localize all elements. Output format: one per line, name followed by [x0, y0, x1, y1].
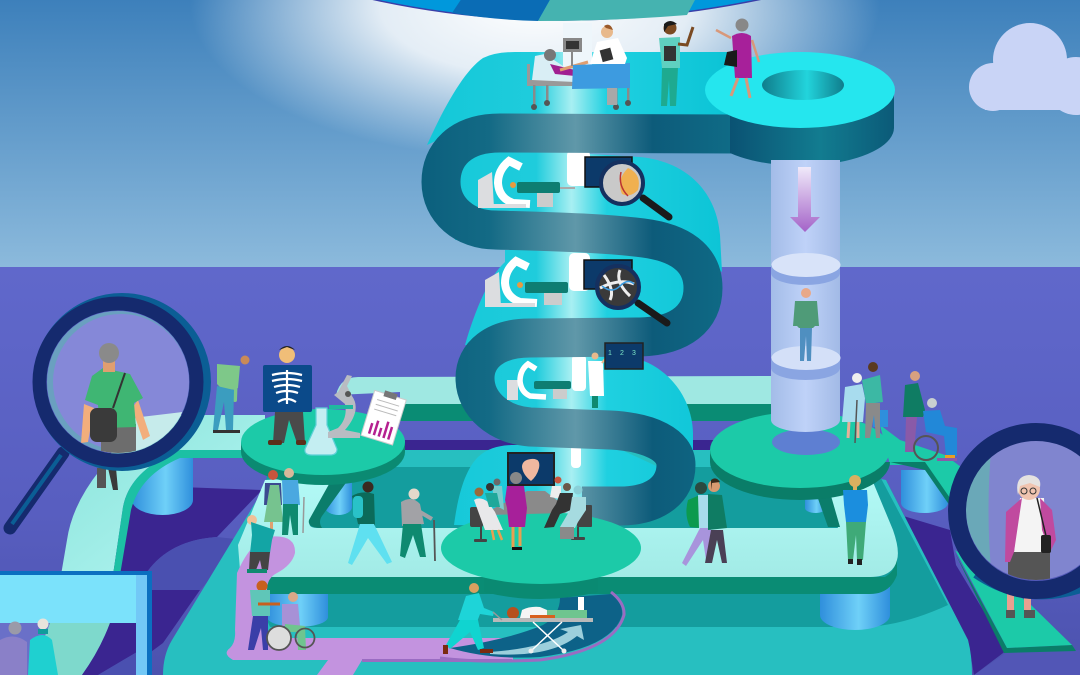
x-ray ribcage	[272, 370, 302, 404]
green left disc	[241, 409, 405, 485]
monitor with steps	[605, 343, 643, 369]
older couple on left arm	[264, 468, 304, 535]
wall monitor with heart	[508, 453, 554, 485]
lens with heart scan	[601, 162, 669, 217]
monitor with steps: 2	[620, 350, 624, 357]
green meeting disc	[441, 512, 641, 599]
top ward bed with patient	[527, 49, 631, 110]
ground platform	[163, 450, 972, 675]
people under the gate	[0, 618, 58, 675]
left entry path	[61, 415, 265, 575]
person in elevator	[793, 288, 819, 361]
stooped woman	[247, 515, 275, 573]
spiral cyan floors	[427, 52, 735, 527]
right magnifying glass	[957, 432, 1080, 618]
man guiding wheelchair patient	[248, 580, 314, 650]
clipboard with chart	[361, 388, 407, 445]
nurse pushing stretcher	[443, 583, 494, 654]
monitor with steps: 1	[608, 350, 612, 357]
right group old lady and carer	[842, 362, 888, 443]
doctor at bedside	[563, 25, 627, 105]
curved arrow on the floor	[490, 625, 584, 655]
glass elevator column	[771, 160, 840, 432]
imaging scene 3	[507, 343, 643, 408]
lens with vessels	[597, 266, 667, 323]
arrow: downward in elevator	[790, 167, 820, 232]
monitor with steps: 3	[632, 350, 636, 357]
right group nurse and wheelchair patient	[903, 371, 957, 461]
legs below the lens	[97, 468, 118, 490]
stretcher bay half disc	[440, 592, 624, 661]
top-right platform disc	[705, 52, 895, 166]
man with backpack	[348, 482, 392, 565]
central ring platform side	[262, 555, 897, 594]
meeting group	[470, 453, 592, 550]
old man with cane	[400, 488, 435, 561]
spiral dark ribbon	[441, 133, 735, 506]
ground shadows	[113, 440, 1080, 675]
purple care path	[227, 536, 513, 675]
overhead dish	[350, 0, 785, 21]
microscope	[328, 375, 360, 438]
monitor	[585, 157, 632, 187]
lens person	[81, 343, 150, 458]
light glow under the dish	[190, 0, 880, 160]
sky background	[0, 0, 1080, 268]
back bridge platform	[336, 376, 775, 421]
woman with ponytail	[843, 475, 868, 565]
white light columns	[563, 23, 592, 468]
green right disc	[710, 400, 965, 506]
sea background	[0, 267, 1080, 675]
bent man with back pain	[213, 356, 250, 433]
imaging scene 2	[485, 260, 667, 323]
stretcher with patient	[493, 607, 593, 654]
nurse waving	[659, 21, 693, 106]
lens woman	[1005, 475, 1056, 585]
central ring platform top	[238, 470, 898, 577]
cloud	[969, 23, 1080, 115]
legs below right lens	[1006, 590, 1035, 618]
man holding x-ray	[263, 346, 312, 445]
doctor at screen	[588, 352, 608, 408]
lower green ramp on the right	[955, 550, 1076, 653]
gate frame at bottom left	[0, 571, 152, 675]
imaging scene 1	[478, 157, 669, 217]
flask	[305, 408, 337, 455]
monitor	[584, 260, 632, 289]
support cylinders	[132, 458, 948, 630]
ring inner walls	[309, 477, 840, 528]
woman in magenta dress	[716, 18, 759, 98]
walking couple	[682, 478, 727, 566]
left magnifying glass	[10, 297, 207, 528]
